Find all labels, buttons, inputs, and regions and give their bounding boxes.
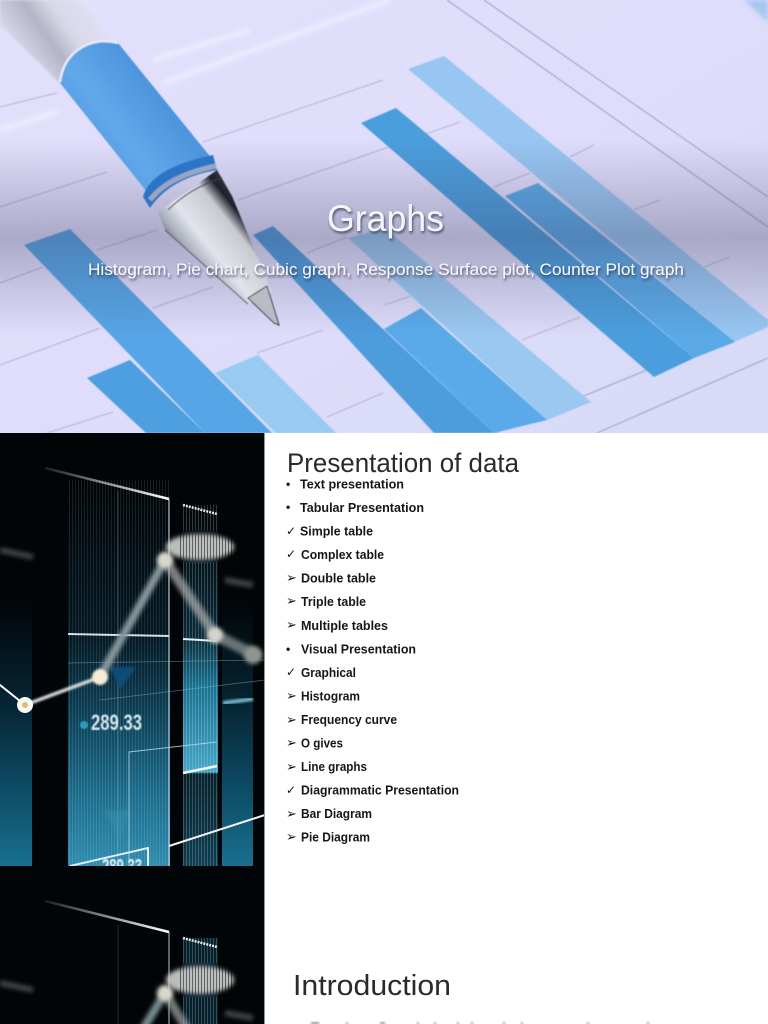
subtitle: Histogram, Pie chart, Cubic graph, Response Surface plot, Counter Plot graph bbox=[88, 260, 684, 279]
chart points bbox=[17, 552, 262, 713]
list: presentation types: Line graphs bbox=[301, 760, 367, 774]
list: presentation types: ➢ bbox=[286, 594, 297, 609]
list: presentation types: ➢ bbox=[286, 618, 297, 633]
list: presentation types: Simple table bbox=[300, 524, 373, 538]
list: presentation types: • bbox=[286, 500, 290, 514]
panel: dark data image bbox=[0, 433, 265, 878]
line chart bbox=[0, 560, 255, 705]
icon: pen bbox=[0, 0, 279, 325]
list: presentation types: Visual Presentation bbox=[301, 642, 416, 656]
list: presentation types: ➢ bbox=[286, 689, 297, 704]
list: presentation types: ✓ bbox=[286, 783, 296, 797]
chart bars bbox=[24, 0, 768, 433]
list: presentation types: ➢ bbox=[286, 807, 297, 822]
list: presentation types: O gives bbox=[301, 736, 343, 750]
list: presentation types: Frequency curve bbox=[301, 713, 397, 727]
value label bbox=[80, 714, 142, 731]
list: presentation types: Bar Diagram bbox=[301, 807, 372, 821]
list: presentation types: ➢ bbox=[286, 830, 297, 845]
list: presentation types: Graphical bbox=[301, 666, 356, 680]
panel: hero photo of pen on bar chart bbox=[0, 0, 768, 433]
list: presentation types: • bbox=[286, 477, 290, 491]
heading: introduction: Introduction bbox=[293, 970, 451, 1002]
list: presentation types: ✓ bbox=[286, 547, 296, 561]
cut-off body line at page edge bbox=[311, 1022, 649, 1024]
list: presentation types: Histogram bbox=[301, 690, 360, 704]
list: presentation types: Complex table bbox=[301, 548, 384, 562]
list: presentation types: Triple table bbox=[301, 595, 366, 609]
dark gradient band behind title bbox=[0, 154, 768, 322]
list: presentation types: Diagrammatic Presentation bbox=[301, 784, 459, 798]
list: presentation types: ➢ bbox=[286, 571, 297, 586]
list: presentation types: ➢ bbox=[286, 736, 297, 751]
title: Graphs bbox=[327, 198, 444, 239]
list: presentation types: • bbox=[286, 642, 290, 656]
heading: presentation of data: Presentation of data bbox=[287, 448, 520, 478]
list: presentation types: Multiple tables bbox=[301, 619, 388, 633]
list: presentation types: ✓ bbox=[286, 665, 296, 679]
list: presentation types bbox=[286, 477, 459, 845]
list: presentation types: ✓ bbox=[286, 524, 296, 538]
list: presentation types: Pie Diagram bbox=[301, 830, 370, 844]
cut-off value label: 289.33 bbox=[102, 856, 142, 878]
list: presentation types: Text presentation bbox=[300, 478, 404, 492]
list: presentation types: ➢ bbox=[286, 760, 297, 775]
list: presentation types: ➢ bbox=[286, 713, 297, 728]
panel: dark data image repeated bbox=[0, 866, 265, 1024]
value label: 289.33 bbox=[91, 710, 142, 735]
list: presentation types: Tabular Presentation bbox=[300, 501, 424, 515]
list: presentation types: Double table bbox=[301, 572, 376, 586]
